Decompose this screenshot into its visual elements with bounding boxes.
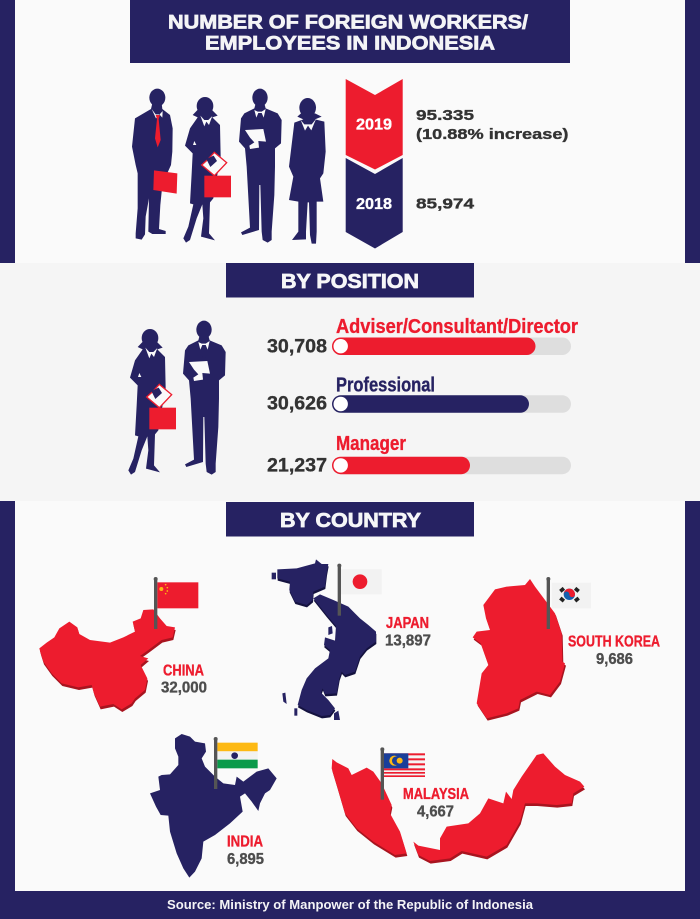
panel: total foreign workers [15,0,685,263]
heading: by country [226,502,474,536]
chevron: 2019: 2019 [356,116,392,134]
label: South Korea [568,634,660,668]
flag: South Korea [546,577,591,629]
2019 value [416,107,568,143]
label: China: CHINA [163,662,204,680]
label: Japan [385,615,431,650]
map: South Korea [473,577,591,721]
flag: India [214,737,258,789]
label: India: INDIA [227,834,263,850]
map: China [39,577,198,712]
heading: by country: BY COUNTRY [280,510,422,532]
label: India: 6,895 [227,851,264,868]
heading: by position [226,263,474,298]
icon: woman in skirt suit [289,98,326,244]
label: China: 32,000 [161,680,207,696]
2018 value: 85,974 [416,196,475,212]
label: South Korea: SOUTH KOREA [568,634,660,650]
label: Malaysia: MALAYSIA [403,786,469,803]
chevron: 2018: 2018 [356,196,392,213]
label: South Korea: 9,686 [596,651,633,668]
2019 value: (10.88% increase) [416,126,568,143]
panel: by country [15,501,685,891]
source footer: Source: Ministry of Manpower of the Republic of Indonesia [167,897,534,912]
label: Japan: 13,897 [385,632,431,650]
2019 value: 95.335 [416,107,474,124]
label: Malaysia: 4,667 [417,804,454,820]
panel: by position [0,263,700,501]
title banner: NUMBER OF FOREIGN WORKERS/ [168,12,529,34]
map: Japan [272,559,382,720]
bar: manager: Manager [336,433,406,455]
flag: Malaysia [380,747,425,800]
title banner: EMPLOYEES IN INDONESIA [205,32,495,54]
bar: manager [267,433,571,476]
flag: Japan [337,564,382,616]
label: China [161,662,207,696]
icon: man holding tablet [239,89,282,243]
label: India [227,834,264,868]
bar: adviser consultant director: Adviser/Consultant/Director [336,316,578,338]
bar: professional: Professional [336,374,435,396]
label: Malaysia [403,786,469,820]
map: India [150,734,277,878]
year chevrons [346,79,403,248]
heading: by position: BY POSITION [281,271,419,293]
bar: adviser consultant director [267,316,578,358]
chevron: 2018 [346,158,403,248]
icon: group of four business people [132,89,326,244]
bar: professional: 30,626 [267,392,327,414]
label: Japan: JAPAN [386,615,429,632]
title banner [130,0,570,63]
flag: China [154,577,198,629]
map: Malaysia [332,747,585,864]
icon: woman and man silhouettes [128,321,226,475]
icon: man with red tie and briefcase [132,89,177,240]
bar: manager: 21,237 [267,454,327,476]
bar: adviser consultant director: 30,708 [267,336,327,358]
bar: professional [267,374,571,414]
chevron: 2019 [346,79,403,170]
